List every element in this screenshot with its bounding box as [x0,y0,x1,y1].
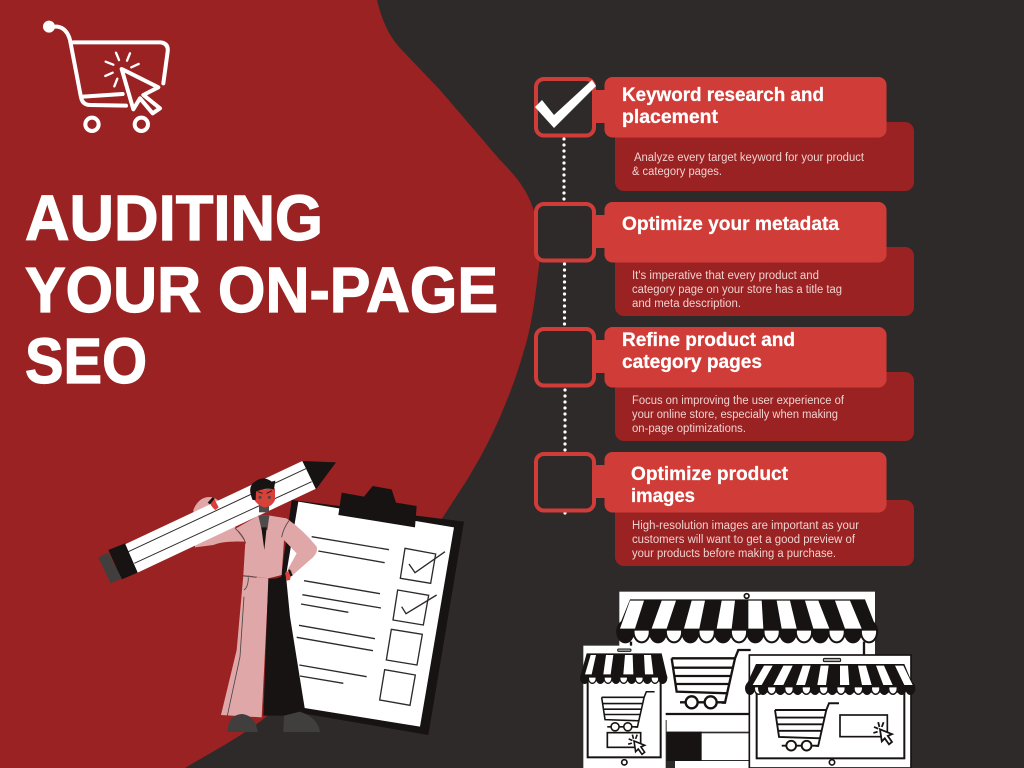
heading: images [631,486,695,507]
description: and meta description. [632,298,741,310]
heading: Optimize your metadata [622,214,839,235]
description: Focus on improving the user experience of [632,395,845,407]
person body [221,478,320,732]
pencil [98,461,336,583]
description [632,520,859,560]
illustration: person with pencil and clipboard [98,461,464,735]
description: on-page optimizations. [632,423,746,435]
heading: placement [622,107,719,128]
heading: category pages [622,352,762,373]
step 2: metadata [536,202,914,316]
desktop store [617,592,877,768]
description: category page on your store has a title tag [632,284,842,296]
step 4: product images [536,452,914,566]
step 1: keyword research [535,77,914,191]
hand [209,498,219,510]
step 3: product and category pages [536,327,914,441]
arm behind pencil [193,497,245,547]
description [632,152,865,178]
description: your online store, especially when making [632,409,838,421]
heading [622,330,795,373]
description: & category pages. [632,166,722,178]
title [25,182,498,397]
description: It's imperative that every product and [632,270,819,282]
clipboard [263,486,464,735]
description: Analyze every target keyword for your product [634,152,865,164]
heading: Refine product and [622,330,795,351]
icon: check mark [535,80,596,128]
title: YOUR ON-PAGE [25,254,498,326]
icon: shopping cart with cursor [43,21,168,131]
description: customers will want to get a good preview of [632,534,856,546]
heading [631,464,789,507]
description [632,270,842,310]
connector: dotted timeline [564,139,565,514]
title: AUDITING [25,182,323,254]
tablet store [580,646,667,768]
description: High-resolution images are important as your [632,520,859,532]
head [250,478,275,512]
description [632,395,845,435]
red curved panel [0,0,540,768]
heading: Keyword research and [622,85,824,106]
laptop store [745,655,915,768]
description: your products before making a purchase. [632,548,836,560]
title: SEO [25,325,147,397]
heading: Optimize product [631,464,789,485]
illustration: online stores on devices [580,592,915,768]
heading [622,85,824,128]
